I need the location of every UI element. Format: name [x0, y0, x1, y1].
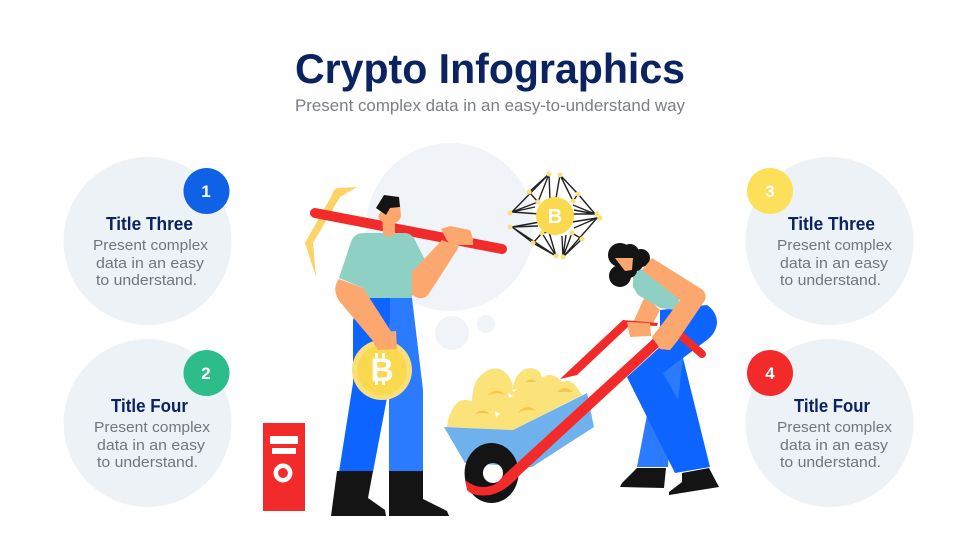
coin: B [370, 352, 394, 388]
badge 2: 2 [201, 364, 211, 383]
illustration: man with pickaxe [305, 187, 502, 516]
neck [382, 212, 395, 236]
badge 2 [184, 350, 230, 396]
far arm [632, 296, 660, 325]
lower arm [335, 279, 394, 341]
pickaxe head [305, 187, 357, 277]
card 3 text: data in an easy [780, 255, 889, 272]
icon: blockchain network with coin [508, 172, 602, 260]
card 3 text: to understand. [780, 272, 881, 289]
lower barrow handle [465, 337, 660, 495]
lower hand [373, 331, 397, 350]
card 1 text: to understand. [96, 272, 197, 289]
raised hand [441, 226, 473, 245]
badge 3: 3 [765, 182, 775, 201]
card 4 text [777, 419, 893, 471]
front pants [627, 305, 717, 473]
badge 1 [184, 168, 230, 214]
hair [376, 195, 400, 215]
card 1 text [93, 237, 209, 289]
badge 4 [747, 350, 793, 396]
rear handle [678, 333, 702, 354]
panel: card 3 [746, 157, 914, 325]
subtitle: Present complex data in an easy-to-understand way [295, 97, 686, 115]
pants highlight [663, 358, 683, 400]
card 3 heading: Title Three [788, 214, 875, 234]
far hand on handle [627, 322, 651, 337]
raised arm [412, 240, 459, 298]
gold pile [447, 368, 582, 430]
icon: red server box [263, 423, 305, 511]
tray [444, 393, 594, 467]
torso [339, 233, 426, 298]
badge 1: 1 [201, 182, 211, 201]
top [633, 270, 680, 310]
card 3 text [777, 237, 893, 289]
card 4 text: to understand. [780, 454, 881, 471]
left boot [331, 471, 386, 516]
coin [352, 340, 412, 400]
card 2 text: Present complex [94, 419, 211, 436]
card 2 text: data in an easy [97, 437, 206, 454]
card 3 text: Present complex [777, 237, 893, 254]
card 2 text: to understand. [97, 454, 198, 471]
illustration: wheelbarrow [444, 320, 682, 503]
wheel [465, 443, 519, 503]
near arm [642, 258, 706, 350]
pickaxe handle [315, 213, 502, 249]
card 4 heading: Title Four [794, 396, 870, 416]
card 4 text: Present complex [777, 419, 893, 436]
illustration: woman pushing [560, 243, 719, 495]
left leg [339, 298, 390, 472]
hair [608, 243, 650, 287]
near hand [652, 320, 682, 350]
thought bubble background [366, 143, 534, 350]
back leg [637, 400, 680, 467]
badge 3 [747, 168, 793, 214]
face [379, 205, 401, 223]
back boot [620, 468, 666, 488]
card 2 heading: Title Four [111, 396, 188, 416]
front boot [669, 468, 719, 495]
card 2 text [94, 419, 211, 471]
card 4 text: data in an easy [780, 437, 889, 454]
right leg [389, 298, 423, 472]
badge 4: 4 [765, 364, 775, 383]
card 1 heading: Title Three [106, 214, 193, 234]
icon: blockchain network with coin: B [548, 206, 562, 228]
card 1 text: data in an easy [96, 255, 205, 272]
panel: card 1 [64, 157, 232, 325]
card 1 text: Present complex [93, 237, 209, 254]
panel: card 2 [64, 339, 232, 507]
title: Crypto Infographics [295, 45, 685, 92]
panel: card 4 [746, 339, 914, 507]
right boot [389, 471, 449, 516]
face [615, 258, 633, 271]
upper barrow handle [560, 320, 658, 379]
